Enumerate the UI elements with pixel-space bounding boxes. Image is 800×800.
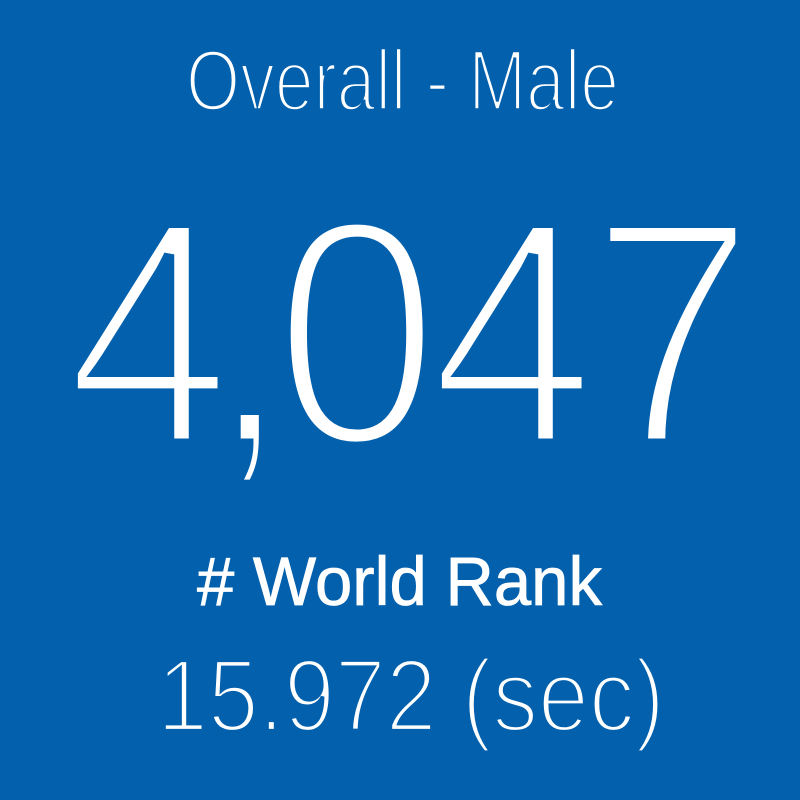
label: # World Rank: # World Rank — [197, 543, 602, 620]
value: 15.972 (sec): 15.972 (sec) — [157, 638, 665, 753]
big number: 4,047: 4,047 — [66, 153, 755, 513]
heading: Overall - Male: Overall - Male — [186, 33, 619, 129]
